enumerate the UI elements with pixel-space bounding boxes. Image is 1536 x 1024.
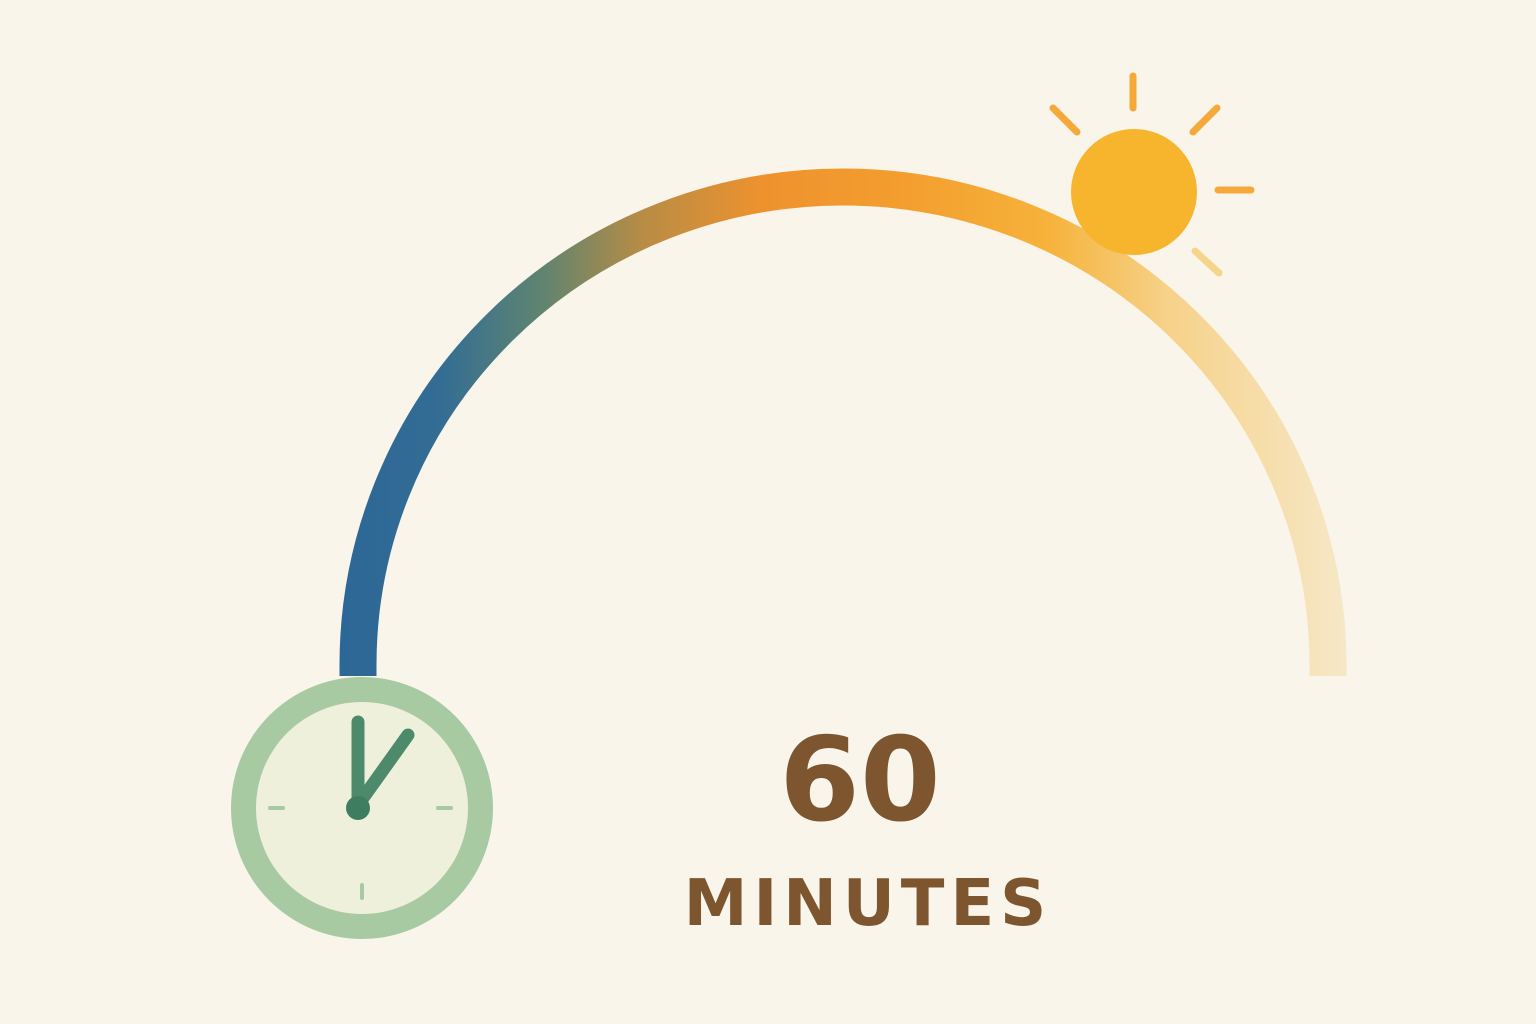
- arc: progress path: [358, 187, 1328, 676]
- text: 60: 60: [779, 713, 941, 848]
- icon: sun: [1053, 76, 1251, 273]
- text: MINUTES: MINUTES: [684, 867, 1052, 941]
- icon: clock: [231, 677, 493, 939]
